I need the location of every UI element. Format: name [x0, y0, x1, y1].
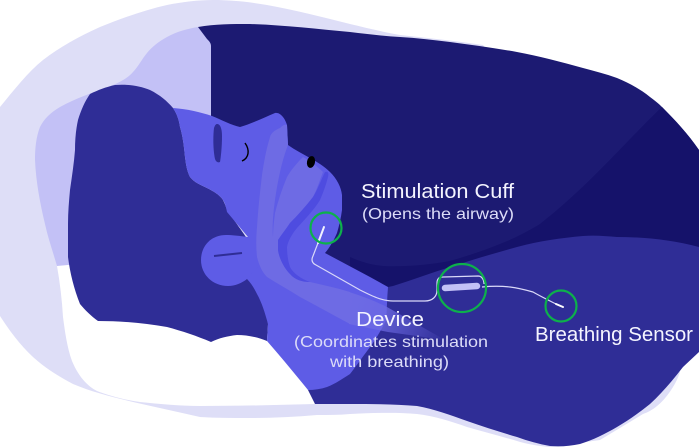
- closed eye: [242, 143, 248, 161]
- sensor tip: [556, 304, 563, 307]
- dark navy background: bed and room: [198, 24, 699, 300]
- label: device: Device: [356, 309, 424, 331]
- neck highlight fade: [349, 292, 445, 340]
- label: stimulation cuff: Stimulation Cuff: [361, 181, 514, 203]
- blanket: [308, 236, 699, 446]
- neck highlight: [256, 125, 350, 324]
- nostril: [306, 155, 316, 169]
- airway muscle curve: [278, 172, 328, 282]
- ear line: [214, 253, 242, 256]
- label: opens the airway: (Opens the airway): [362, 206, 514, 223]
- label: coordinates stimulation: (Coordinates stimulation: [294, 334, 488, 351]
- darker shadow region: [350, 107, 699, 300]
- lavender pillow backing: [35, 27, 225, 290]
- green circle: device: [438, 264, 486, 312]
- hair: [68, 85, 268, 342]
- cuff electrode: [318, 227, 324, 243]
- green circle: cuff: [310, 212, 342, 244]
- eyebrow: [213, 124, 222, 162]
- stimulation lead wire: [312, 243, 484, 301]
- implanted device: [445, 286, 477, 288]
- white pillow: [57, 262, 315, 406]
- green circle: sensor: [546, 290, 576, 322]
- label: with breathing: with breathing): [329, 354, 449, 371]
- ear: [201, 235, 262, 286]
- face and neck: [173, 108, 388, 390]
- label: breathing sensor: Breathing Sensor: [535, 324, 693, 346]
- sensor wire: [482, 286, 556, 304]
